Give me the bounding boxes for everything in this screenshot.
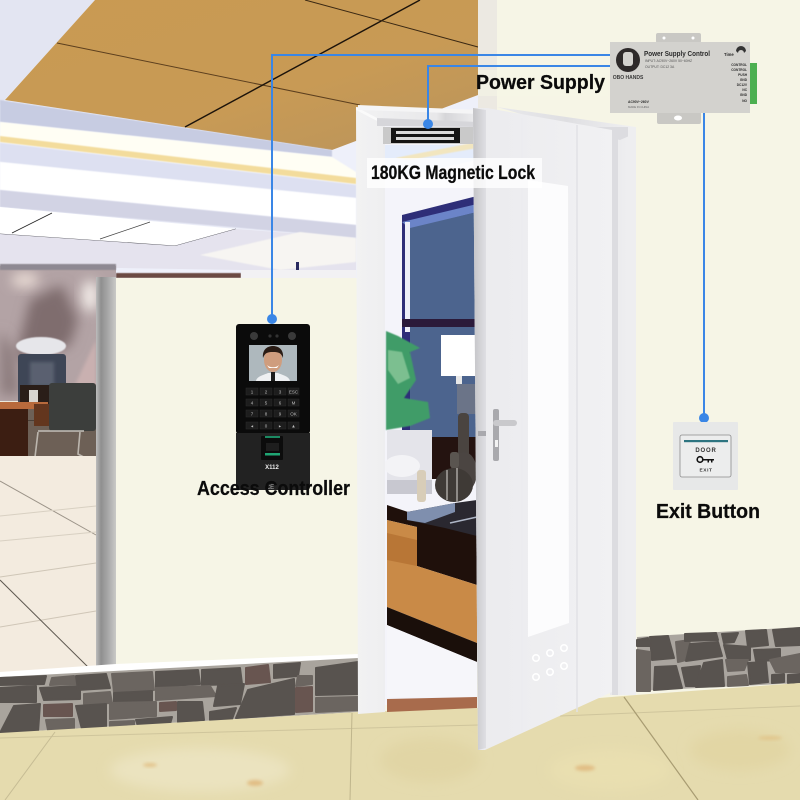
door leaf: [473, 108, 612, 750]
wire: magnetic lock to power supply: [428, 66, 612, 124]
wire: exit button to power supply: [703, 112, 705, 418]
magnetic lock: [383, 127, 473, 144]
door frame: [356, 105, 480, 714]
screen with portrait: [249, 345, 297, 381]
keypad: 6: [279, 400, 282, 406]
power supply text: NC: [742, 88, 748, 92]
label: access controller: Access Controller: [197, 478, 350, 500]
keypad: 3: [279, 390, 282, 394]
office furniture: [0, 337, 96, 464]
mural wall: [0, 264, 116, 401]
keypad: 7: [251, 412, 254, 416]
threshold: [387, 697, 477, 712]
keypad: ESC: [289, 390, 299, 394]
label: exit button: Exit Button: [656, 501, 760, 523]
skirting highlight: [0, 654, 358, 678]
power supply text: INPUT: AC90V~260V 50~60HZ: [645, 59, 692, 63]
room tile floor: [0, 456, 96, 681]
model number: X112: [265, 465, 280, 471]
wire: access controller to power supply: [272, 55, 612, 319]
label: magnetic lock background: [367, 158, 542, 188]
wall corner strip: [478, 0, 497, 110]
keypad: 2: [265, 390, 268, 394]
keypad: 5: [265, 400, 268, 406]
exit button: EXIT: [699, 468, 713, 474]
keypad: 8: [265, 412, 268, 416]
logo: OBO HANDS: [613, 75, 644, 81]
right door frame: [497, 107, 636, 695]
power supply text: GND: [740, 93, 748, 97]
keypad: ◂: [251, 424, 254, 428]
interior: sofa and vases: [384, 413, 477, 502]
keypad: 0: [265, 424, 268, 428]
partition pillar: [96, 277, 116, 670]
view through the doorway: [385, 125, 477, 705]
stone skirting: right: [637, 627, 800, 691]
label: power supply: Power Supply: [476, 72, 606, 94]
power supply text: Time: [724, 52, 734, 57]
power supply text: PUSH: [738, 73, 748, 77]
interior: lamp: [441, 335, 477, 414]
power supply text: NO: [742, 99, 748, 103]
wire end dot: exit button: [699, 413, 709, 423]
marble floor: [0, 683, 800, 800]
room ceiling: [0, 0, 478, 280]
door vent holes: [533, 645, 567, 680]
power supply text: OUTPUT: DC12 3A: [645, 65, 675, 69]
keypad: 4: [251, 400, 254, 406]
stone skirting: left: [0, 658, 358, 733]
door handle: [478, 409, 517, 461]
power supply text: DC12V: [737, 83, 748, 87]
interior: coffee table: [387, 470, 477, 697]
keypad: 1: [251, 390, 254, 394]
power supply text: MADE IN CHINA: [628, 105, 649, 109]
power supply text: GND: [740, 78, 748, 82]
interior: plant: [386, 331, 430, 430]
keypad: M: [292, 400, 296, 406]
wire end dot: controller: [267, 314, 277, 324]
power supply text: Power Supply Control: [644, 49, 710, 58]
keypad: OK: [290, 412, 297, 416]
power supply unit: [610, 33, 757, 124]
keypad: [246, 388, 299, 429]
fingerprint reader: [261, 436, 283, 460]
label: magnetic lock: 180KG Magnetic Lock: [371, 163, 535, 184]
wire end dot: lock: [423, 119, 433, 129]
logo: [613, 48, 644, 81]
exit button: DOOR: [695, 448, 717, 454]
CE mark: CE: [266, 485, 274, 491]
keypad: ▲: [291, 424, 296, 428]
power supply text: CONTROL: [731, 68, 747, 72]
door glass panel: [528, 180, 569, 637]
exit button: [673, 422, 738, 490]
keypad: 9: [279, 412, 282, 416]
label: power supply background: [478, 70, 608, 96]
power supply text: AC90V~260V: [628, 100, 650, 104]
power supply text: [628, 49, 748, 109]
key glyph: [697, 457, 714, 462]
keypad: ▸: [279, 424, 282, 428]
access controller device: [236, 324, 310, 491]
power supply text: CONTROL: [731, 63, 747, 67]
partition wall: [116, 278, 358, 664]
